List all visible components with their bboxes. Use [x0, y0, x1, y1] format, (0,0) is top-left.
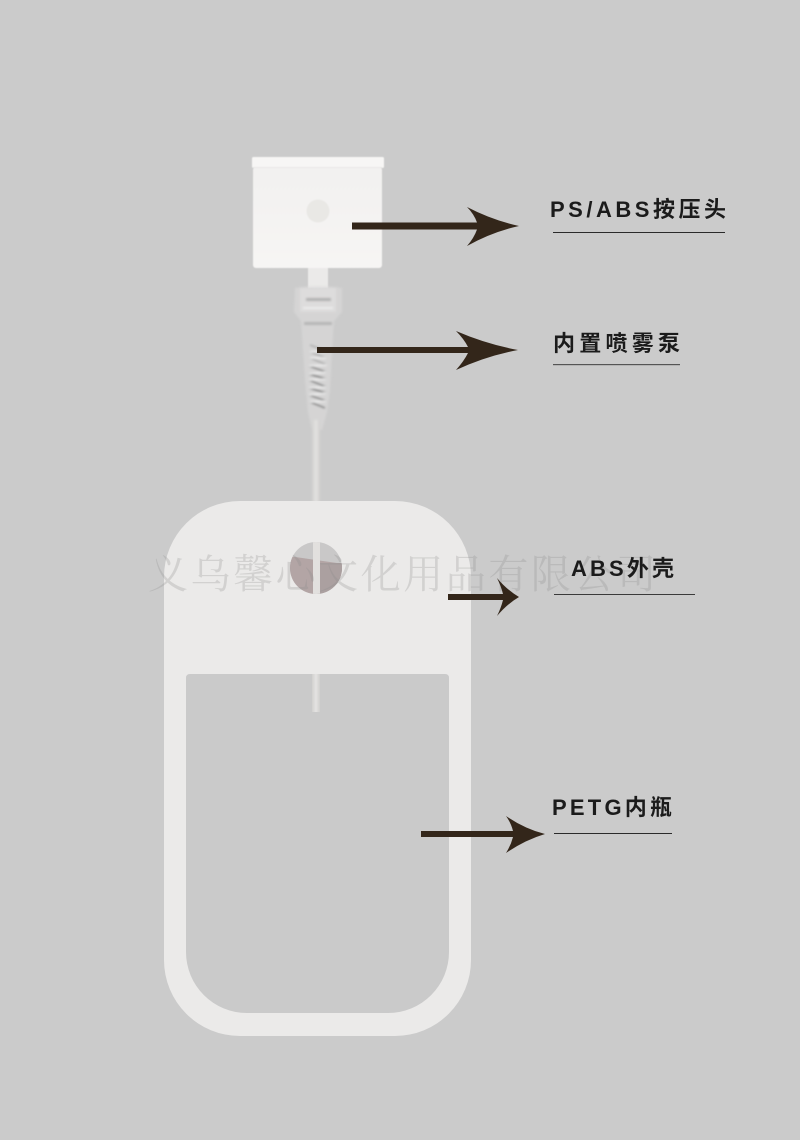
shell body	[164, 501, 471, 1036]
arrow: press head	[352, 207, 519, 246]
arrow: shell	[448, 578, 519, 616]
icon: press head cap	[252, 157, 384, 288]
label: PETG inner bottle	[552, 795, 672, 834]
watermark: 义乌馨心文化用品有限公司	[148, 552, 656, 597]
label: PS/ABS press head: PS/ABS按压头	[550, 197, 726, 222]
panel: ABS outer shell	[164, 501, 471, 1036]
arrow: pump	[317, 331, 518, 370]
shell hole	[290, 542, 342, 594]
label: built-in spray pump: 内置喷雾泵	[553, 331, 680, 356]
arrow: inner bottle	[421, 816, 545, 853]
tube seen through window	[312, 674, 320, 712]
label: PETG inner bottle: PETG内瓶	[552, 795, 672, 820]
label: ABS shell: ABS外壳	[571, 556, 674, 581]
icon: spray pump with spring	[294, 286, 342, 502]
shell window	[186, 674, 449, 1013]
diagram: spray bottle exploded view	[150, 156, 726, 1036]
